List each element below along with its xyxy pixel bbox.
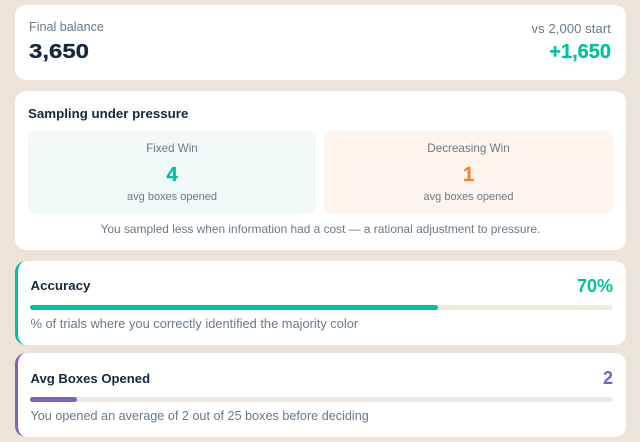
caption: decreasing win: avg boxes opened	[424, 191, 513, 203]
label: fixed win: Fixed Win	[146, 142, 198, 154]
text: accuracy description: % of trials where you correctly identified the majority color	[30, 316, 358, 331]
value: fixed win: 4	[166, 164, 178, 186]
progress bar: boxes opened 8%	[30, 397, 613, 402]
heading: accuracy: Accuracy	[30, 278, 90, 293]
panel: fixed win	[28, 131, 316, 214]
panel: average boxes opened	[15, 353, 626, 437]
text: boxes description: You opened an average of 2 out of 25 boxes before deciding	[30, 409, 369, 423]
value: final balance: 3,650	[29, 40, 89, 63]
heading: sampling under pressure: Sampling under pressure	[28, 106, 188, 120]
label: decreasing win: Decreasing Win	[427, 142, 510, 154]
label: final balance: Final balance	[29, 20, 104, 34]
panel: accuracy	[15, 261, 626, 345]
panel: final balance	[15, 4, 626, 80]
panel: decreasing win	[324, 131, 613, 214]
value: decreasing win: 1	[463, 164, 474, 186]
heading: average boxes opened: Avg Boxes Opened	[30, 370, 150, 386]
value: accuracy: 70%	[577, 276, 613, 296]
text: sampling conclusion: You sampled less when information had a cost — a rational adjustment to pressure.	[101, 222, 540, 236]
value: gain: +1,650	[549, 41, 611, 63]
progress bar: accuracy 70%	[30, 305, 613, 310]
panel: sampling under pressure	[15, 91, 626, 250]
label: versus start: vs 2,000 start	[532, 20, 611, 36]
caption: fixed win: avg boxes opened	[127, 191, 217, 203]
value: average boxes opened: 2	[603, 368, 613, 388]
